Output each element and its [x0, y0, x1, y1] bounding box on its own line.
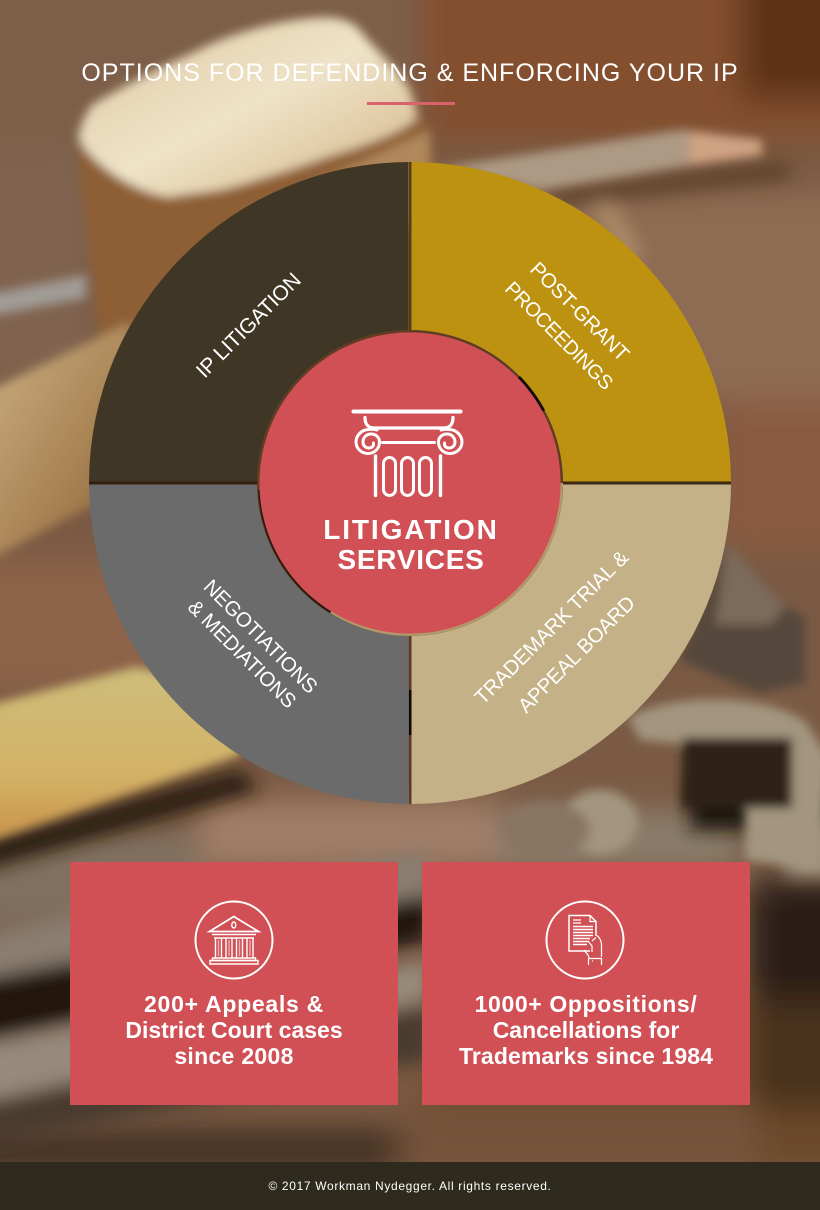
- stat text: 200+ Appeals &: [144, 991, 324, 1017]
- segment: Trademark Trial & Appeal Board: [412, 484, 731, 804]
- icon: courthouse: [194, 900, 274, 980]
- wrench tool: [628, 699, 820, 870]
- stat card: oppositions: [422, 862, 750, 1105]
- stat card: appeals: [70, 862, 398, 1105]
- footer: [0, 1162, 820, 1210]
- stat text: District Court cases: [125, 1017, 343, 1043]
- stat text: Trademarks since 1984: [459, 1043, 713, 1069]
- center circle: [257, 330, 563, 636]
- dark under tool: [690, 780, 820, 830]
- stat text: 1000+ Oppositions/: [475, 991, 697, 1017]
- workbench streaks bottom left: [0, 850, 430, 985]
- segment: Negotiations & Mediations: [89, 484, 408, 804]
- mallet top face: [78, 17, 418, 197]
- stat text: Cancellations for: [493, 1017, 679, 1043]
- stat text: [459, 991, 713, 1069]
- yellow handle: [0, 667, 240, 848]
- footer: © 2017 Workman Nydegger. All rights reserved.: [268, 1179, 552, 1193]
- pencil: [440, 130, 690, 190]
- left handle: [0, 322, 130, 570]
- segment: IP Litigation: [89, 162, 408, 482]
- segment: Negotiations & Mediations: NEGOTIATIONS: [199, 575, 322, 698]
- stat text: [125, 991, 343, 1069]
- title: OPTIONS FOR DEFENDING & ENFORCING YOUR IP: [81, 59, 739, 87]
- metal block: [680, 543, 805, 693]
- dark under yellow handle: [0, 770, 260, 880]
- title underline: [367, 102, 455, 105]
- icon: ionic column: [354, 412, 462, 496]
- small wood shape: [592, 205, 642, 265]
- segment: Post-Grant Proceedings: POST-GRANT: [525, 258, 634, 366]
- segment: Negotiations & Mediations: & MEDIATIONS: [183, 596, 300, 713]
- pencil shadow: [540, 162, 790, 205]
- icon: hand holding document: [546, 900, 624, 980]
- center heading: SERVICES: [337, 544, 485, 575]
- center heading: [323, 514, 499, 575]
- segment: Post-Grant Proceedings: [412, 162, 731, 482]
- segment: Post-Grant Proceedings: PROCEEDINGS: [500, 278, 617, 394]
- mallet side: [78, 120, 436, 340]
- segment: IP Litigation: IP LITIGATION: [192, 269, 306, 383]
- gaps between segments: [89, 162, 731, 804]
- metal rod: [0, 275, 86, 318]
- segment: Trademark Trial & Appeal Board: TRADEMARK TRIAL &: [470, 546, 634, 709]
- stat text: since 2008: [174, 1043, 294, 1069]
- center heading: LITIGATION: [323, 514, 499, 545]
- segment: Trademark Trial & Appeal Board: APPEAL BOARD: [514, 592, 640, 718]
